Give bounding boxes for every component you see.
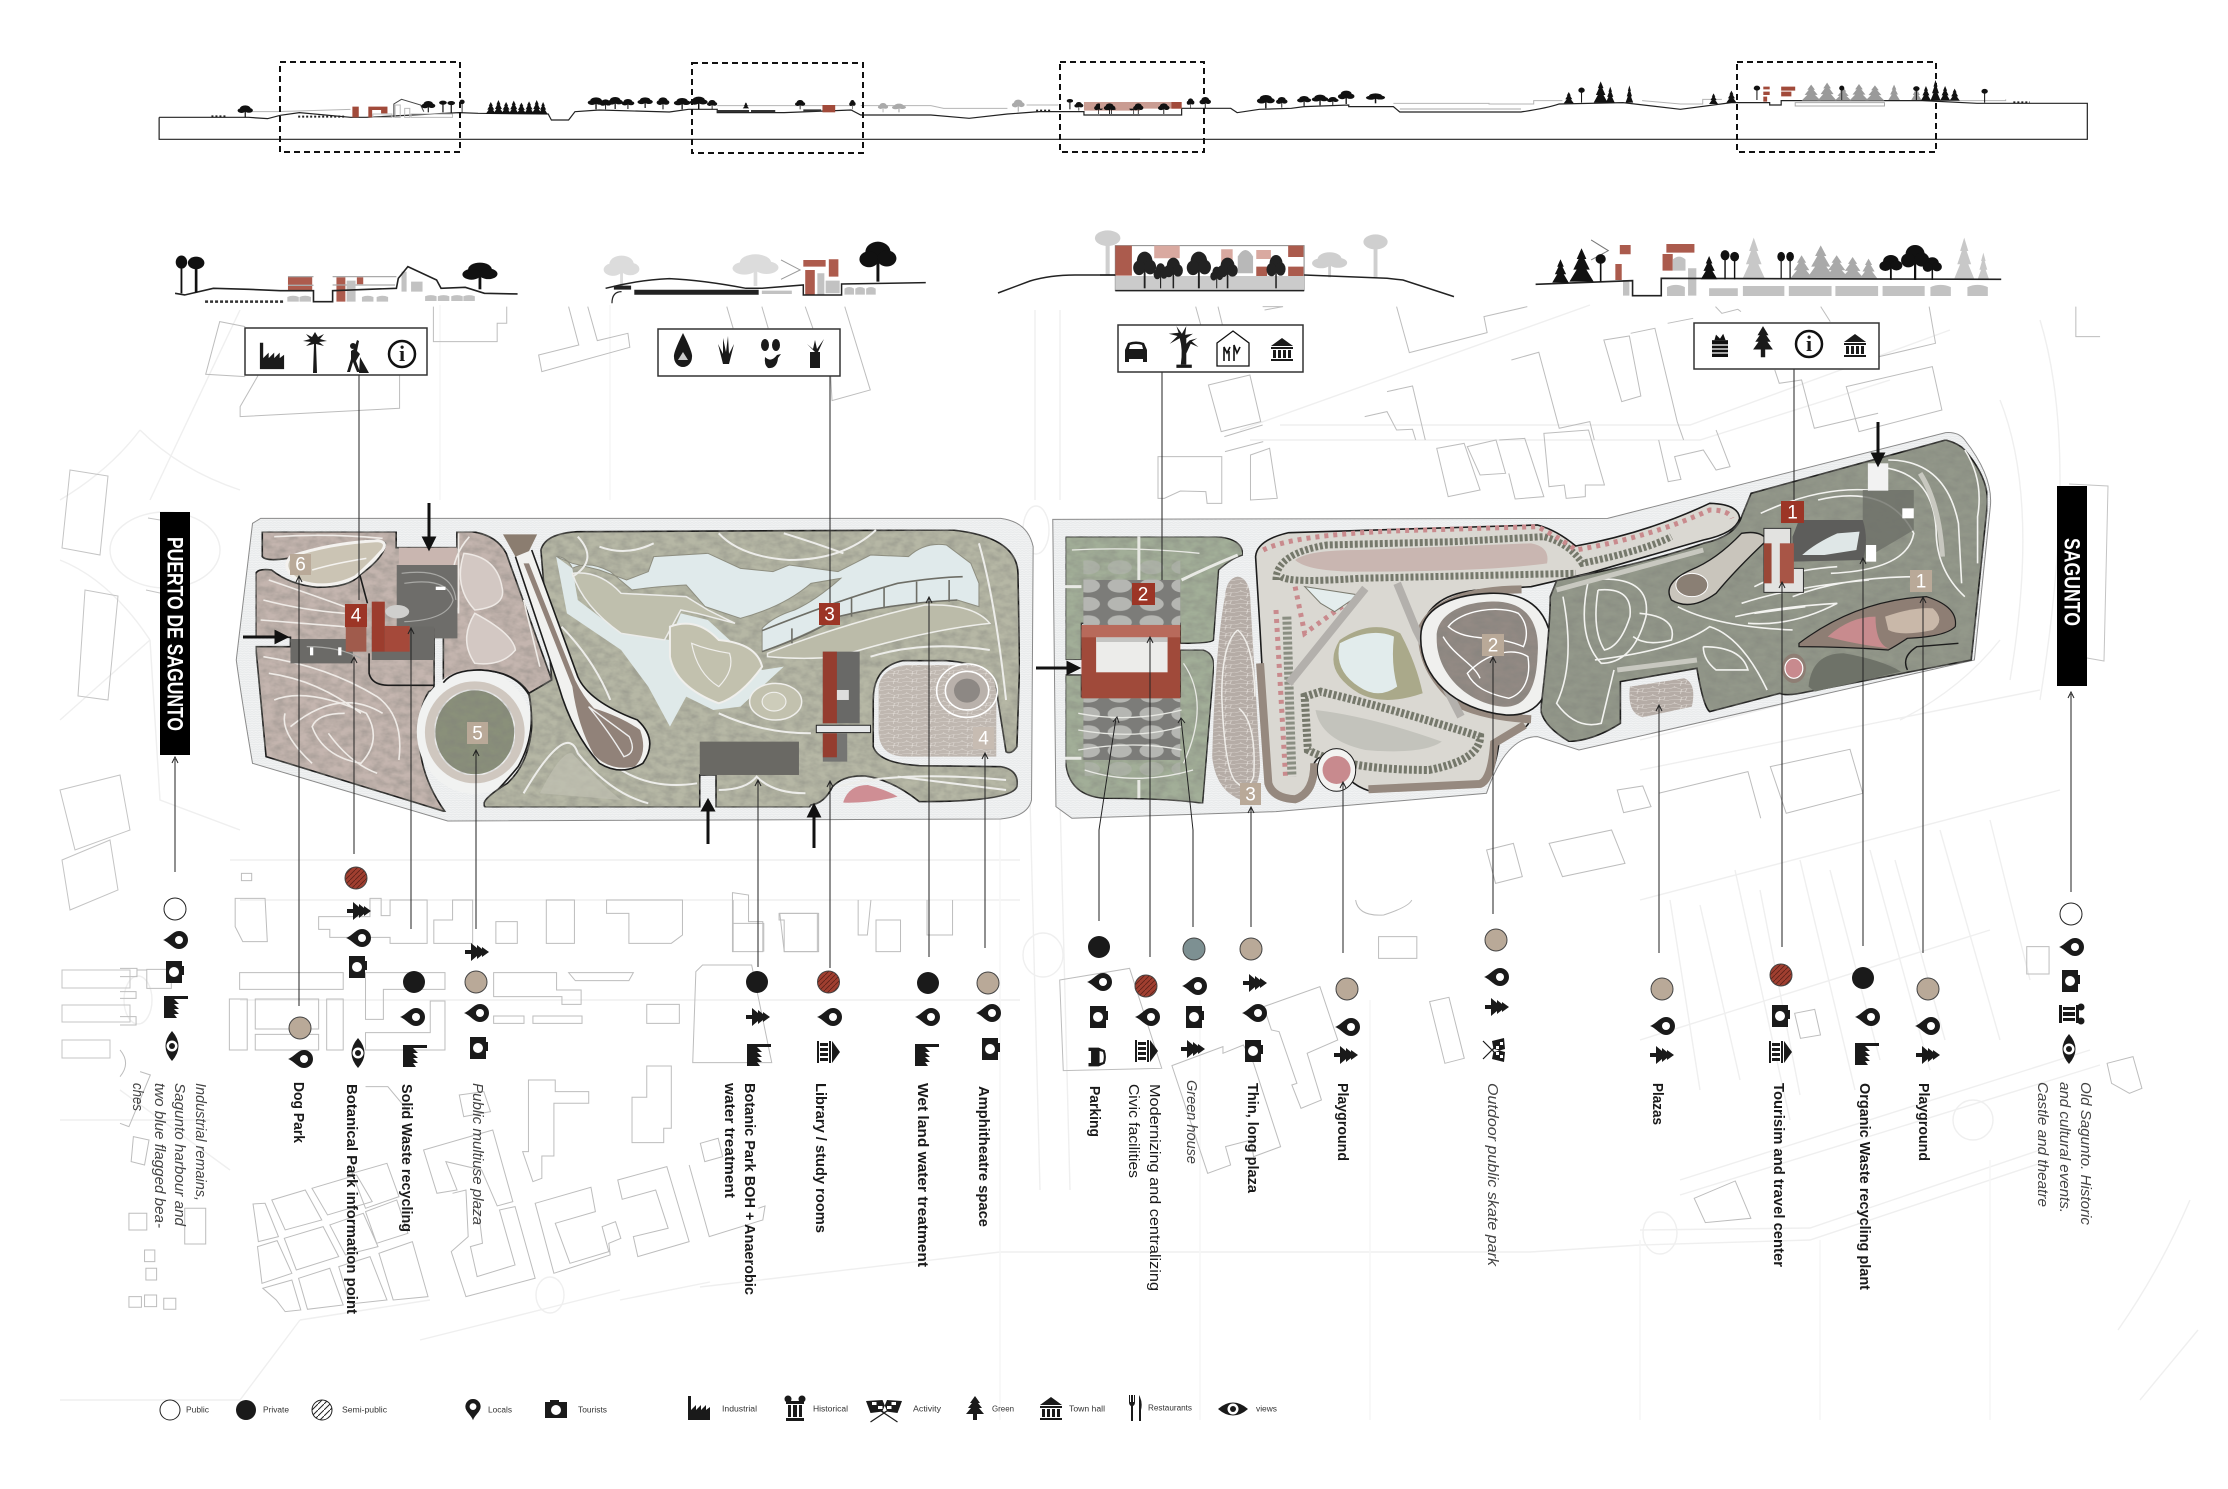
column: Outdoor public skate park: Outdoor public skate park bbox=[1484, 1083, 1500, 1267]
legend item: Restaurants bbox=[1129, 1395, 1192, 1421]
legend item: Private bbox=[236, 1400, 290, 1420]
legend item: Town hall: Town hall bbox=[1069, 1404, 1105, 1414]
column: Old Sagunto: Castle and theatre bbox=[2034, 1082, 2050, 1207]
column: Library / study rooms: Library / study rooms bbox=[812, 1083, 828, 1233]
legend item: Historical bbox=[784, 1396, 848, 1421]
column: Playground 2 bbox=[1334, 978, 1360, 1161]
detail section 1 bbox=[175, 256, 518, 302]
banner: Puerto de Sagunto: PUERTO DE SAGUNTO bbox=[162, 537, 188, 731]
column: Old Sagunto: and cultural events. bbox=[2056, 1082, 2072, 1213]
diagonal avenue and teardrop garden bbox=[503, 534, 650, 770]
detail section 4 bbox=[1536, 238, 2001, 296]
wetland park ground bbox=[484, 530, 1020, 807]
civic building bbox=[1081, 625, 1180, 698]
column: Old Sagunto: Old Sagunto. Historic bbox=[2077, 1082, 2093, 1226]
column: Amphitheatre space bbox=[975, 972, 1001, 1227]
column: Puerto de Sagunto: Industrial remains, bbox=[192, 1083, 208, 1201]
column: Playground 1 bbox=[1915, 978, 1940, 1161]
icon box 3: car, palm, greenhouse, town hall bbox=[1118, 325, 1303, 372]
column: Plazas: Plazas bbox=[1649, 1083, 1665, 1125]
column: Solid Waste recycling: Solid Waste recycling bbox=[398, 1084, 414, 1232]
column: Dog Park bbox=[288, 1017, 313, 1144]
legend item: Semi-public bbox=[312, 1400, 387, 1420]
column: Public multiuse plaza: Public multiuse plaza bbox=[469, 1083, 485, 1225]
park plan: east section bbox=[1053, 433, 1991, 818]
park plan: west section bbox=[236, 518, 1033, 821]
context: building footprints, south-west bbox=[120, 873, 819, 1312]
legend bbox=[160, 1395, 1277, 1422]
column: Solid Waste recycling bbox=[398, 971, 427, 1232]
legend item: views: views bbox=[1256, 1404, 1277, 1414]
long section ground line, west half bbox=[159, 97, 1140, 139]
column: Playground 1: Playground bbox=[1915, 1083, 1931, 1161]
context: surrounding city road network bbox=[60, 305, 2198, 1420]
column: Botanic Park BOH: Botanic Park BOH + Anaerobic bbox=[741, 1083, 757, 1295]
context: building footprints, above east park bbox=[1158, 430, 1863, 818]
long section: whole park bbox=[159, 80, 2087, 139]
icon box 1: industry, tree, climbing, information bbox=[245, 328, 427, 375]
legend item: Activity: Activity bbox=[913, 1404, 941, 1414]
civic centre green with trees bbox=[1066, 537, 1243, 803]
numbered markers on the plan: 3 bbox=[1245, 784, 1256, 806]
skate park mound bbox=[1421, 593, 1552, 715]
column: Botanic Park BOH: water treatment bbox=[721, 1082, 737, 1198]
column: Green house: Green house bbox=[1183, 1080, 1199, 1164]
banner: Puerto de Sagunto bbox=[160, 512, 190, 755]
legend item: Tourists: Tourists bbox=[578, 1406, 607, 1414]
numbered markers on the plan: 3 bbox=[824, 604, 835, 626]
legend item: Public bbox=[160, 1400, 209, 1420]
context: building footprints, north-east side bbox=[1196, 307, 2100, 440]
long section ground line, east half bbox=[1100, 80, 2087, 139]
legend item: Historical: Historical bbox=[813, 1404, 848, 1414]
column: Wet land water treatment bbox=[914, 972, 940, 1267]
column: Puerto de Sagunto: two blue flagged bea- bbox=[151, 1083, 167, 1228]
column: Plazas bbox=[1649, 978, 1675, 1125]
column: Outdoor public skate park bbox=[1483, 929, 1509, 1267]
legend item: Industrial bbox=[688, 1396, 757, 1420]
organic recycling plant and tourism centre bbox=[1764, 463, 1914, 592]
numbered markers on the plan: 5 bbox=[472, 724, 483, 744]
context: building footprints, north side bbox=[206, 307, 870, 417]
amphitheatre bbox=[879, 664, 997, 757]
library buildings bbox=[816, 652, 871, 762]
column: Puerto de Sagunto: Sagunto harbour and bbox=[171, 1083, 187, 1227]
column: Modernizing and centralizing Civic facilities: Civic facilities bbox=[1125, 1084, 1141, 1178]
detail section 3 bbox=[1095, 230, 1454, 297]
column: Playground 2: Playground bbox=[1334, 1083, 1350, 1161]
legend item: Semi-public: Semi-public bbox=[342, 1406, 387, 1414]
numbered markers on the plan: 4 bbox=[351, 606, 362, 626]
numbered markers on the plan bbox=[290, 501, 1932, 806]
icon box 4: recycling, pine, information, town hall bbox=[1694, 323, 1879, 369]
column: Modernizing and centralizing Civic facilities: Modernizing and centralizing bbox=[1146, 1084, 1162, 1291]
column: Botanical Park information point bbox=[343, 867, 371, 1314]
column: Organic Waste recycling plant: Organic Waste recycling plant bbox=[1856, 1083, 1872, 1290]
detail section 2 bbox=[604, 242, 926, 303]
numbered markers on the plan: 2 bbox=[1138, 584, 1148, 606]
legend item: Locals bbox=[465, 1399, 512, 1420]
column: Puerto de Sagunto: ches bbox=[129, 1083, 145, 1111]
legend item: Public: Public bbox=[186, 1406, 209, 1414]
column: Old Sagunto bbox=[2034, 903, 2093, 1226]
numbered markers on the plan: 4 bbox=[978, 728, 989, 750]
legend item: Private: Private bbox=[263, 1406, 290, 1414]
legend item: Green bbox=[966, 1396, 1014, 1420]
legend item: Town hall bbox=[1040, 1397, 1105, 1420]
column: Tourism and travel center: Tourisim and travel center bbox=[1770, 1083, 1786, 1267]
legend item: Industrial: Industrial bbox=[722, 1404, 757, 1414]
column: Public multiuse plaza bbox=[464, 943, 489, 1225]
central gardens bbox=[1256, 503, 1740, 802]
legend item: views bbox=[1218, 1402, 1277, 1416]
banner: Sagunto: SAGUNTO bbox=[2060, 538, 2084, 626]
column: Parking: Parking bbox=[1086, 1086, 1102, 1137]
numbered markers on the plan: 1 bbox=[1916, 572, 1926, 592]
column: Library / study rooms bbox=[812, 971, 842, 1233]
column: Parking bbox=[1086, 936, 1112, 1137]
context: building footprints, south-centre bbox=[733, 900, 1464, 1173]
legend item: Tourists bbox=[545, 1400, 607, 1418]
icon box 2: water, reeds, birds, education bbox=[658, 329, 840, 376]
column: Thin, long plaza bbox=[1240, 938, 1267, 1194]
column: Tourism and travel center bbox=[1769, 964, 1792, 1267]
paved perimeter bbox=[236, 518, 1033, 821]
numbered markers on the plan: 1 bbox=[1787, 502, 1798, 524]
column: Organic Waste recycling plant bbox=[1852, 967, 1880, 1290]
entry arrows bbox=[243, 422, 1883, 848]
legend item: Locals: Locals bbox=[488, 1406, 512, 1414]
legend item: Activity bbox=[866, 1400, 941, 1422]
column: Amphitheatre space: Amphitheatre space bbox=[975, 1086, 991, 1227]
dark plazas and civic buildings bbox=[290, 565, 457, 663]
column: Dog Park: Dog Park bbox=[290, 1082, 306, 1144]
BOH plaza bbox=[700, 742, 799, 775]
column: Modernizing and centralizing Civic facilities bbox=[1125, 975, 1162, 1291]
leader lines with arrowheads bbox=[172, 369, 2074, 1006]
legend item: Green: Green bbox=[992, 1404, 1014, 1414]
numbered markers on the plan: 2 bbox=[1488, 636, 1498, 656]
pink pond bbox=[843, 785, 898, 803]
column: Green house bbox=[1181, 938, 1207, 1164]
dashed zoom frames on the long section bbox=[280, 62, 1936, 153]
circular public plaza bbox=[417, 669, 533, 802]
eastern wooded park bbox=[1541, 440, 1987, 742]
context: building footprints, south-east bbox=[1487, 830, 2142, 1223]
banner: Sagunto bbox=[2057, 486, 2087, 686]
pink gardens with dog park bbox=[256, 532, 552, 812]
numbered markers on the plan: 6 bbox=[295, 554, 306, 576]
paved perimeter bbox=[1053, 433, 1991, 818]
column: Wet land water treatment: Wet land water treatment bbox=[914, 1083, 930, 1267]
detail section 3 west slope bbox=[998, 275, 1115, 293]
column: Puerto de Sagunto bbox=[129, 898, 208, 1228]
legend item: Restaurants: Restaurants bbox=[1148, 1404, 1192, 1412]
column: Thin, long plaza: Thin, long plaza bbox=[1244, 1083, 1260, 1194]
context: outlined blocks, far left and behind banners bbox=[60, 470, 2108, 1058]
column: Botanic Park BOH bbox=[721, 971, 771, 1295]
column: Botanical Park information point: Botanical Park information point bbox=[343, 1084, 359, 1314]
thin long plaza bbox=[1212, 577, 1260, 800]
